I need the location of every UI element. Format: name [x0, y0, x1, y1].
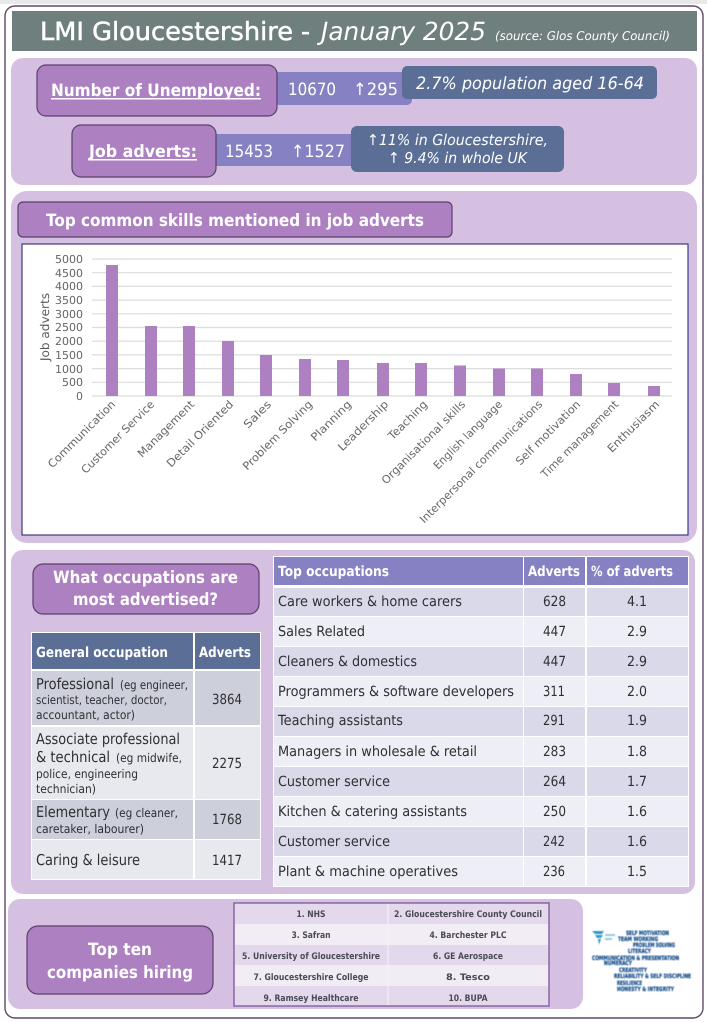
x axis labels	[45, 397, 662, 526]
panel: headline figures	[11, 58, 697, 185]
logo and skills word list: NUMERACY	[604, 960, 632, 967]
table: companies: 3. Safran	[292, 931, 330, 941]
y axis labels: 1000	[55, 363, 83, 376]
row: associate professional: police, engineering	[36, 767, 138, 781]
x axis labels: Planning	[308, 398, 354, 444]
row: elementary: 1768	[212, 812, 242, 828]
advert counts: 236	[543, 864, 565, 880]
job adverts change callout	[351, 126, 564, 172]
row: elementary: (eg cleaner,	[115, 806, 178, 820]
row: professional: accountant, actor)	[36, 708, 135, 722]
advert counts: 291	[543, 713, 565, 729]
row: professional: scientist, teacher, doctor,	[36, 693, 167, 707]
row: associate professional: Associate professional	[36, 730, 180, 748]
logo and skills word list: TEAM WORKING	[618, 936, 658, 943]
row: associate professional: technician)	[36, 782, 96, 796]
y axis labels: 2000	[55, 335, 83, 348]
icon: skills logo	[592, 931, 615, 945]
row: elementary	[36, 803, 242, 836]
title banner: January 2025	[316, 17, 486, 46]
row: associate professional: 2275	[212, 756, 242, 772]
row: caring and leisure	[36, 851, 242, 869]
job adverts figure: 15453	[225, 142, 273, 162]
table: top occupations: % of adverts	[591, 564, 673, 580]
occupation names: Customer service	[278, 774, 390, 790]
row: caring and leisure: 1417	[212, 853, 242, 869]
row: professional	[36, 675, 242, 722]
skills heading: Top common skills mentioned in job adverts	[46, 211, 424, 231]
companies heading	[27, 926, 213, 994]
advert counts: 242	[543, 834, 565, 850]
logo and skills word list: CREATIVITY	[619, 967, 647, 974]
row: associate professional	[36, 730, 242, 796]
x axis labels: Time management	[538, 397, 622, 481]
advert counts: 283	[543, 744, 566, 760]
job adverts label: Job adverts:	[88, 142, 197, 162]
occupations heading: What occupations are	[53, 568, 238, 588]
logo and skills word list: PROBLEM SOLVING	[633, 942, 675, 949]
x axis labels: Problem Solving	[240, 398, 315, 473]
panel: occupations	[11, 550, 695, 894]
occupation names: Care workers & home carers	[278, 594, 462, 610]
unemployed label: Number of Unemployed:	[51, 81, 261, 101]
row: professional: 3864	[212, 692, 242, 708]
occupation names: Plant & machine operatives	[278, 864, 458, 880]
percentage of adverts: 1.7	[627, 774, 647, 790]
x axis labels: Self motivation	[513, 398, 583, 468]
percentage of adverts	[627, 594, 647, 880]
row: associate professional: (eg midwife,	[116, 751, 182, 765]
x axis labels: Leadership	[335, 398, 391, 454]
row: elementary: Elementary	[36, 803, 110, 821]
occupation names: Kitchen & catering assistants	[278, 804, 467, 820]
table: companies: 8. Tesco	[446, 973, 490, 983]
percentage of adverts: 4.1	[627, 594, 647, 610]
percentage of adverts: 1.9	[627, 713, 647, 729]
bar chart: job adverts by skill	[22, 244, 688, 535]
table: top occupations: Adverts	[528, 564, 580, 580]
table: companies: 1. NHS	[296, 910, 326, 920]
x axis labels: Communication	[45, 398, 118, 471]
unemployed figure: 10670	[288, 80, 336, 100]
logo and skills word list: SELF MOTIVATION	[626, 930, 669, 937]
percentage of adverts: 2.9	[627, 624, 647, 640]
row: caring and leisure: Caring & leisure	[36, 851, 140, 869]
y axis labels: 5000	[55, 253, 83, 266]
advert counts: 628	[543, 594, 566, 610]
y axis labels	[55, 253, 83, 403]
logo and skills word list: LITERACY	[628, 948, 651, 955]
percentage of adverts: 1.5	[627, 864, 647, 880]
y axis labels: 500	[62, 376, 83, 389]
title banner	[12, 11, 697, 51]
row: professional: Professional	[36, 675, 114, 693]
occupations heading: most advertised?	[73, 590, 218, 610]
x axis labels: English language	[431, 398, 505, 472]
table: general occupation	[31, 632, 261, 880]
companies heading: companies hiring	[47, 963, 193, 983]
table: companies: 9. Ramsey Healthcare	[264, 994, 358, 1004]
x axis labels: Detail Oriented	[164, 398, 236, 470]
advert counts: 250	[543, 804, 566, 820]
x axis labels: Organisational skills	[379, 398, 468, 487]
row: professional: (eg engineer,	[120, 678, 188, 692]
unemployed figure: ↑295	[353, 80, 398, 100]
y axis title: Job adverts	[38, 293, 52, 362]
table: companies: 10. BUPA	[448, 994, 488, 1004]
title banner: -	[301, 17, 310, 46]
table: companies: 2. Gloucestershire County Council	[394, 910, 542, 920]
unemployed label	[37, 65, 277, 116]
occupation names	[277, 594, 514, 880]
y axis labels: 1500	[55, 349, 83, 362]
y axis labels: 3000	[55, 308, 83, 321]
logo and skills word list: RESILIENCE	[617, 980, 642, 987]
panel: top ten companies	[8, 899, 583, 1009]
job adverts figure	[209, 134, 361, 166]
table: companies: 5. University of Gloucestershire	[242, 952, 380, 962]
title banner: (source: Glos County Council)	[495, 29, 670, 43]
job adverts change callout: ↑ 9.4% in whole UK	[388, 149, 528, 167]
occupation names: Managers in wholesale & retail	[278, 744, 477, 760]
advert counts	[543, 594, 566, 880]
panel: top skills	[11, 191, 697, 543]
percentage of adverts: 1.6	[627, 804, 647, 820]
logo and skills word list: HONESTY & INTEGRITY	[617, 986, 674, 993]
x axis labels: Interpersonal communications	[417, 398, 545, 526]
unemployed share callout	[402, 66, 657, 99]
advert counts: 264	[543, 774, 566, 790]
title banner: LMI Gloucestershire	[40, 17, 293, 46]
table: companies: 4. Barchester PLC	[430, 931, 507, 941]
job adverts change callout: ↑11% in Gloucestershire,	[367, 131, 548, 149]
x axis labels: Customer Service	[79, 398, 157, 476]
table: top occupations: Top occupations	[278, 564, 389, 580]
occupation names: Customer service	[278, 834, 390, 850]
y axis labels: 0	[76, 390, 83, 403]
x axis labels: Teaching	[385, 398, 430, 443]
x axis labels: Management	[135, 397, 198, 460]
occupation names: Sales Related	[278, 624, 365, 640]
row: elementary: caretaker, labourer)	[36, 822, 144, 836]
percentage of adverts: 2.9	[627, 654, 647, 670]
y axis labels: 3500	[55, 294, 83, 307]
advert counts: 447	[543, 624, 566, 640]
occupations heading	[33, 564, 259, 614]
y axis labels: 4500	[55, 267, 83, 280]
logo and skills word list	[592, 930, 691, 993]
advert counts: 311	[543, 684, 565, 700]
occupation names: Programmers & software developers	[278, 684, 514, 700]
y axis labels: 2500	[55, 321, 83, 334]
percentage of adverts: 1.8	[627, 744, 647, 760]
percentage of adverts: 1.6	[627, 834, 647, 850]
advert counts: 447	[543, 654, 566, 670]
table: general occupation: General occupation	[36, 645, 168, 661]
table: top occupations	[273, 556, 689, 887]
job adverts figure: ↑1527	[291, 142, 345, 162]
row: associate professional: & technical	[36, 748, 110, 766]
unemployed share callout: 2.7% population aged 16-64	[416, 74, 644, 94]
x axis labels: Enthusiasm	[605, 398, 662, 455]
table: companies: 6. GE Aerospace	[433, 952, 503, 962]
occupation names: Teaching assistants	[277, 713, 403, 729]
occupation names: Cleaners & domestics	[278, 654, 417, 670]
table: general occupation: Adverts	[199, 645, 251, 661]
table: companies: 7. Gloucestershire College	[254, 973, 368, 983]
table: companies	[234, 903, 549, 1006]
percentage of adverts: 2.0	[627, 684, 647, 700]
unemployed figure	[274, 72, 412, 105]
y axis labels: 4000	[55, 280, 83, 293]
bars	[106, 265, 660, 396]
skills heading	[18, 202, 452, 237]
job adverts label	[72, 125, 216, 177]
companies heading: Top ten	[88, 940, 152, 960]
x axis labels: Sales	[241, 398, 274, 431]
